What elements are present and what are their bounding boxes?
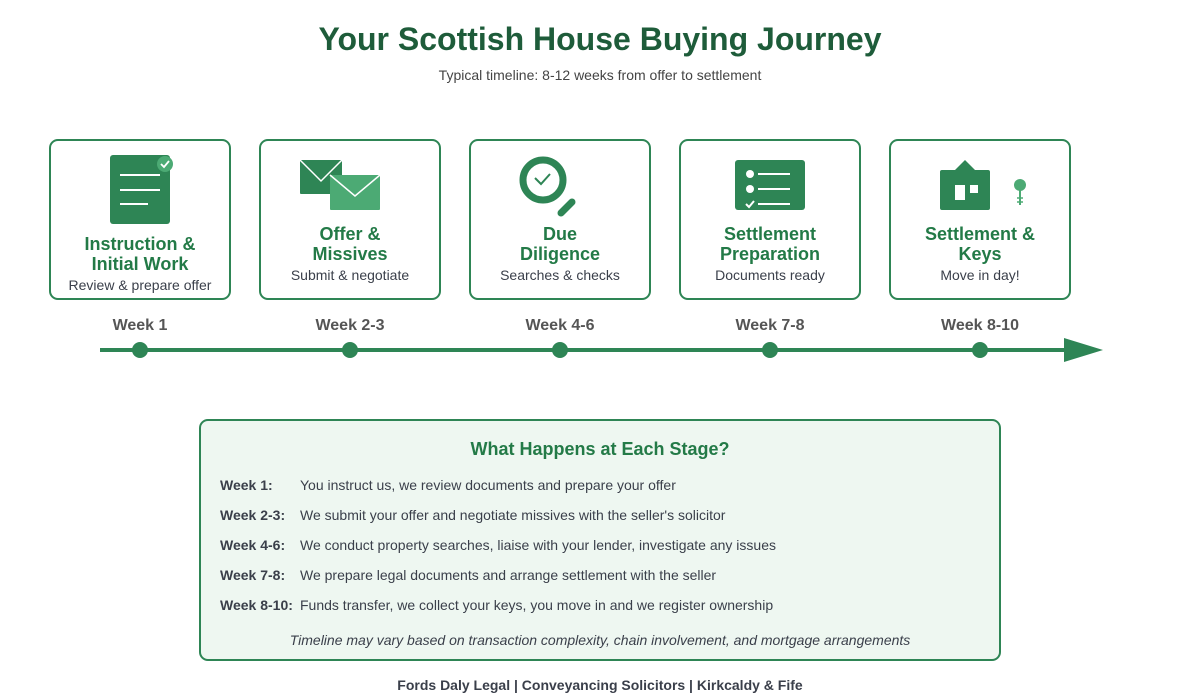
icon: checklist [735, 160, 805, 210]
card: settlement keys: Keys [958, 244, 1002, 264]
panel: stage details: Funds transfer, we collect your keys, you move in and we register ownership [300, 597, 773, 613]
panel: stage details [200, 420, 1000, 660]
timeline [100, 317, 1103, 362]
card: offer: Missives [312, 244, 388, 264]
card: settlement keys: Move in day! [940, 267, 1020, 283]
card: instruction: Instruction & [84, 234, 196, 254]
timeline: Week 7-8 [735, 317, 805, 334]
card: due diligence: Due [543, 224, 577, 244]
icon: document [110, 155, 173, 224]
card: instruction: Initial Work [92, 254, 189, 274]
panel: stage details: Timeline may vary based on transaction complexity, chain involvement, and mortgage arrangements [290, 632, 910, 648]
panel: stage details: Week 2-3: [220, 507, 285, 523]
panel: stage details: We conduct property searches, liaise with your lender, investigate any issues [300, 537, 776, 553]
timeline: Week 4-6 [525, 317, 595, 334]
card: instruction [50, 140, 230, 299]
panel: stage details: Week 4-6: [220, 537, 285, 553]
subtitle: Typical timeline: 8-12 weeks from offer to settlement [439, 67, 761, 83]
card: offer: Submit & negotiate [291, 267, 409, 283]
icon: house and key [940, 160, 1026, 210]
timeline: Week 2-3 [315, 317, 385, 334]
card: instruction: Review & prepare offer [69, 277, 212, 293]
panel: stage details: You instruct us, we review documents and prepare your offer [300, 477, 676, 493]
panel: stage details: Week 7-8: [220, 567, 285, 583]
icon: magnifier [523, 160, 572, 213]
card: due diligence: Searches & checks [500, 267, 620, 283]
card: settlement preparation: Preparation [720, 244, 820, 264]
timeline: Week 8-10 [941, 317, 1019, 334]
card: settlement preparation [680, 140, 860, 299]
panel: stage details: We submit your offer and negotiate missives with the seller's solicitor [300, 507, 726, 523]
card: settlement keys: Settlement & [925, 224, 1035, 244]
panel: stage details: Week 8-10: [220, 597, 293, 613]
timeline: Week 1 [113, 317, 168, 334]
panel: stage details: Week 1: [220, 477, 273, 493]
title: Your Scottish House Buying Journey [318, 21, 882, 57]
panel: stage details: We prepare legal documents and arrange settlement with the seller [300, 567, 716, 583]
card: due diligence: Diligence [520, 244, 600, 264]
card: settlement preparation: Settlement [724, 224, 816, 244]
footer: Fords Daly Legal | Conveyancing Solicitors | Kirkcaldy & Fife [397, 677, 803, 693]
card: offer [260, 140, 440, 299]
card: due diligence [470, 140, 650, 299]
icon: envelopes [300, 160, 380, 210]
card: settlement keys [890, 140, 1070, 299]
panel: stage details: What Happens at Each Stage? [470, 439, 730, 459]
card: settlement preparation: Documents ready [715, 267, 825, 283]
card: offer: Offer & [319, 224, 381, 244]
